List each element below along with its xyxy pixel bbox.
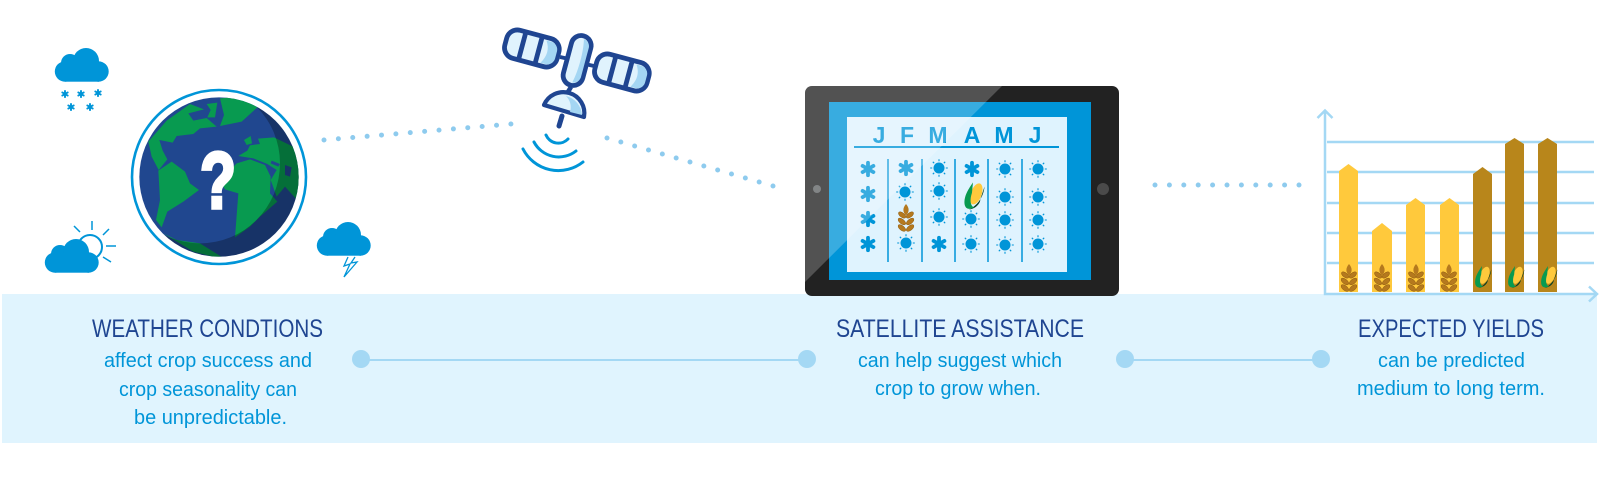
text block: weather conditions — [92, 315, 323, 429]
text block: weather conditions: WEATHER CONDTIONS — [92, 315, 323, 343]
satellite body — [561, 33, 593, 88]
dotted connector: globe to satellite — [324, 124, 511, 140]
globe — [120, 83, 306, 264]
wheat icons — [1340, 264, 1458, 293]
right solar panel — [592, 51, 652, 93]
month labels — [873, 122, 1041, 148]
icon: corn in April — [964, 182, 985, 210]
icon: storm cloud — [317, 222, 371, 277]
icon: wheat in February — [897, 204, 915, 233]
text block: weather conditions: crop seasonality can — [119, 379, 297, 401]
timeline connector right — [1116, 350, 1330, 368]
dotted connector: tablet to chart — [1155, 182, 1300, 188]
satellite connectors — [560, 57, 594, 66]
text block: expected yields: can be predicted — [1378, 350, 1525, 372]
text block: expected yields: medium to long term. — [1357, 378, 1545, 400]
grid lines — [1327, 142, 1594, 263]
info band — [2, 294, 1597, 443]
month labels: J — [1029, 122, 1041, 148]
month labels: M — [994, 122, 1014, 148]
text block: weather conditions: affect crop success and — [104, 350, 312, 372]
calendar — [847, 117, 1067, 272]
wheat bars — [1339, 164, 1459, 292]
icon: sun behind cloud — [45, 221, 116, 273]
text block: satellite assistance — [836, 315, 1084, 400]
question mark: ? — [200, 136, 236, 225]
weather icon grid — [863, 159, 1047, 254]
axes — [1318, 110, 1597, 302]
text block: satellite assistance: crop to grow when. — [875, 378, 1041, 400]
month labels: F — [900, 122, 914, 148]
text block: satellite assistance: SATELLITE ASSISTANCE — [836, 315, 1084, 343]
corn icons — [1475, 265, 1558, 288]
month labels: J — [873, 122, 885, 148]
left solar panel — [502, 27, 562, 69]
bar chart: expected yields — [1318, 110, 1597, 302]
corn bars — [1473, 138, 1557, 292]
icon: satellite — [502, 27, 652, 171]
signal waves — [523, 135, 583, 171]
satellite dish — [544, 92, 584, 117]
timeline connector left — [352, 350, 816, 368]
text block: expected yields: EXPECTED YIELDS — [1358, 315, 1544, 343]
month labels: M — [928, 122, 948, 148]
icon: snow cloud — [55, 48, 109, 110]
text block: satellite assistance: can help suggest which — [858, 350, 1062, 372]
text block: weather conditions: be unpredictable. — [134, 407, 287, 429]
text block: expected yields — [1357, 315, 1545, 400]
dotted connector: satellite to tablet — [607, 138, 773, 186]
tablet — [805, 86, 1119, 296]
month labels: A — [964, 122, 980, 148]
